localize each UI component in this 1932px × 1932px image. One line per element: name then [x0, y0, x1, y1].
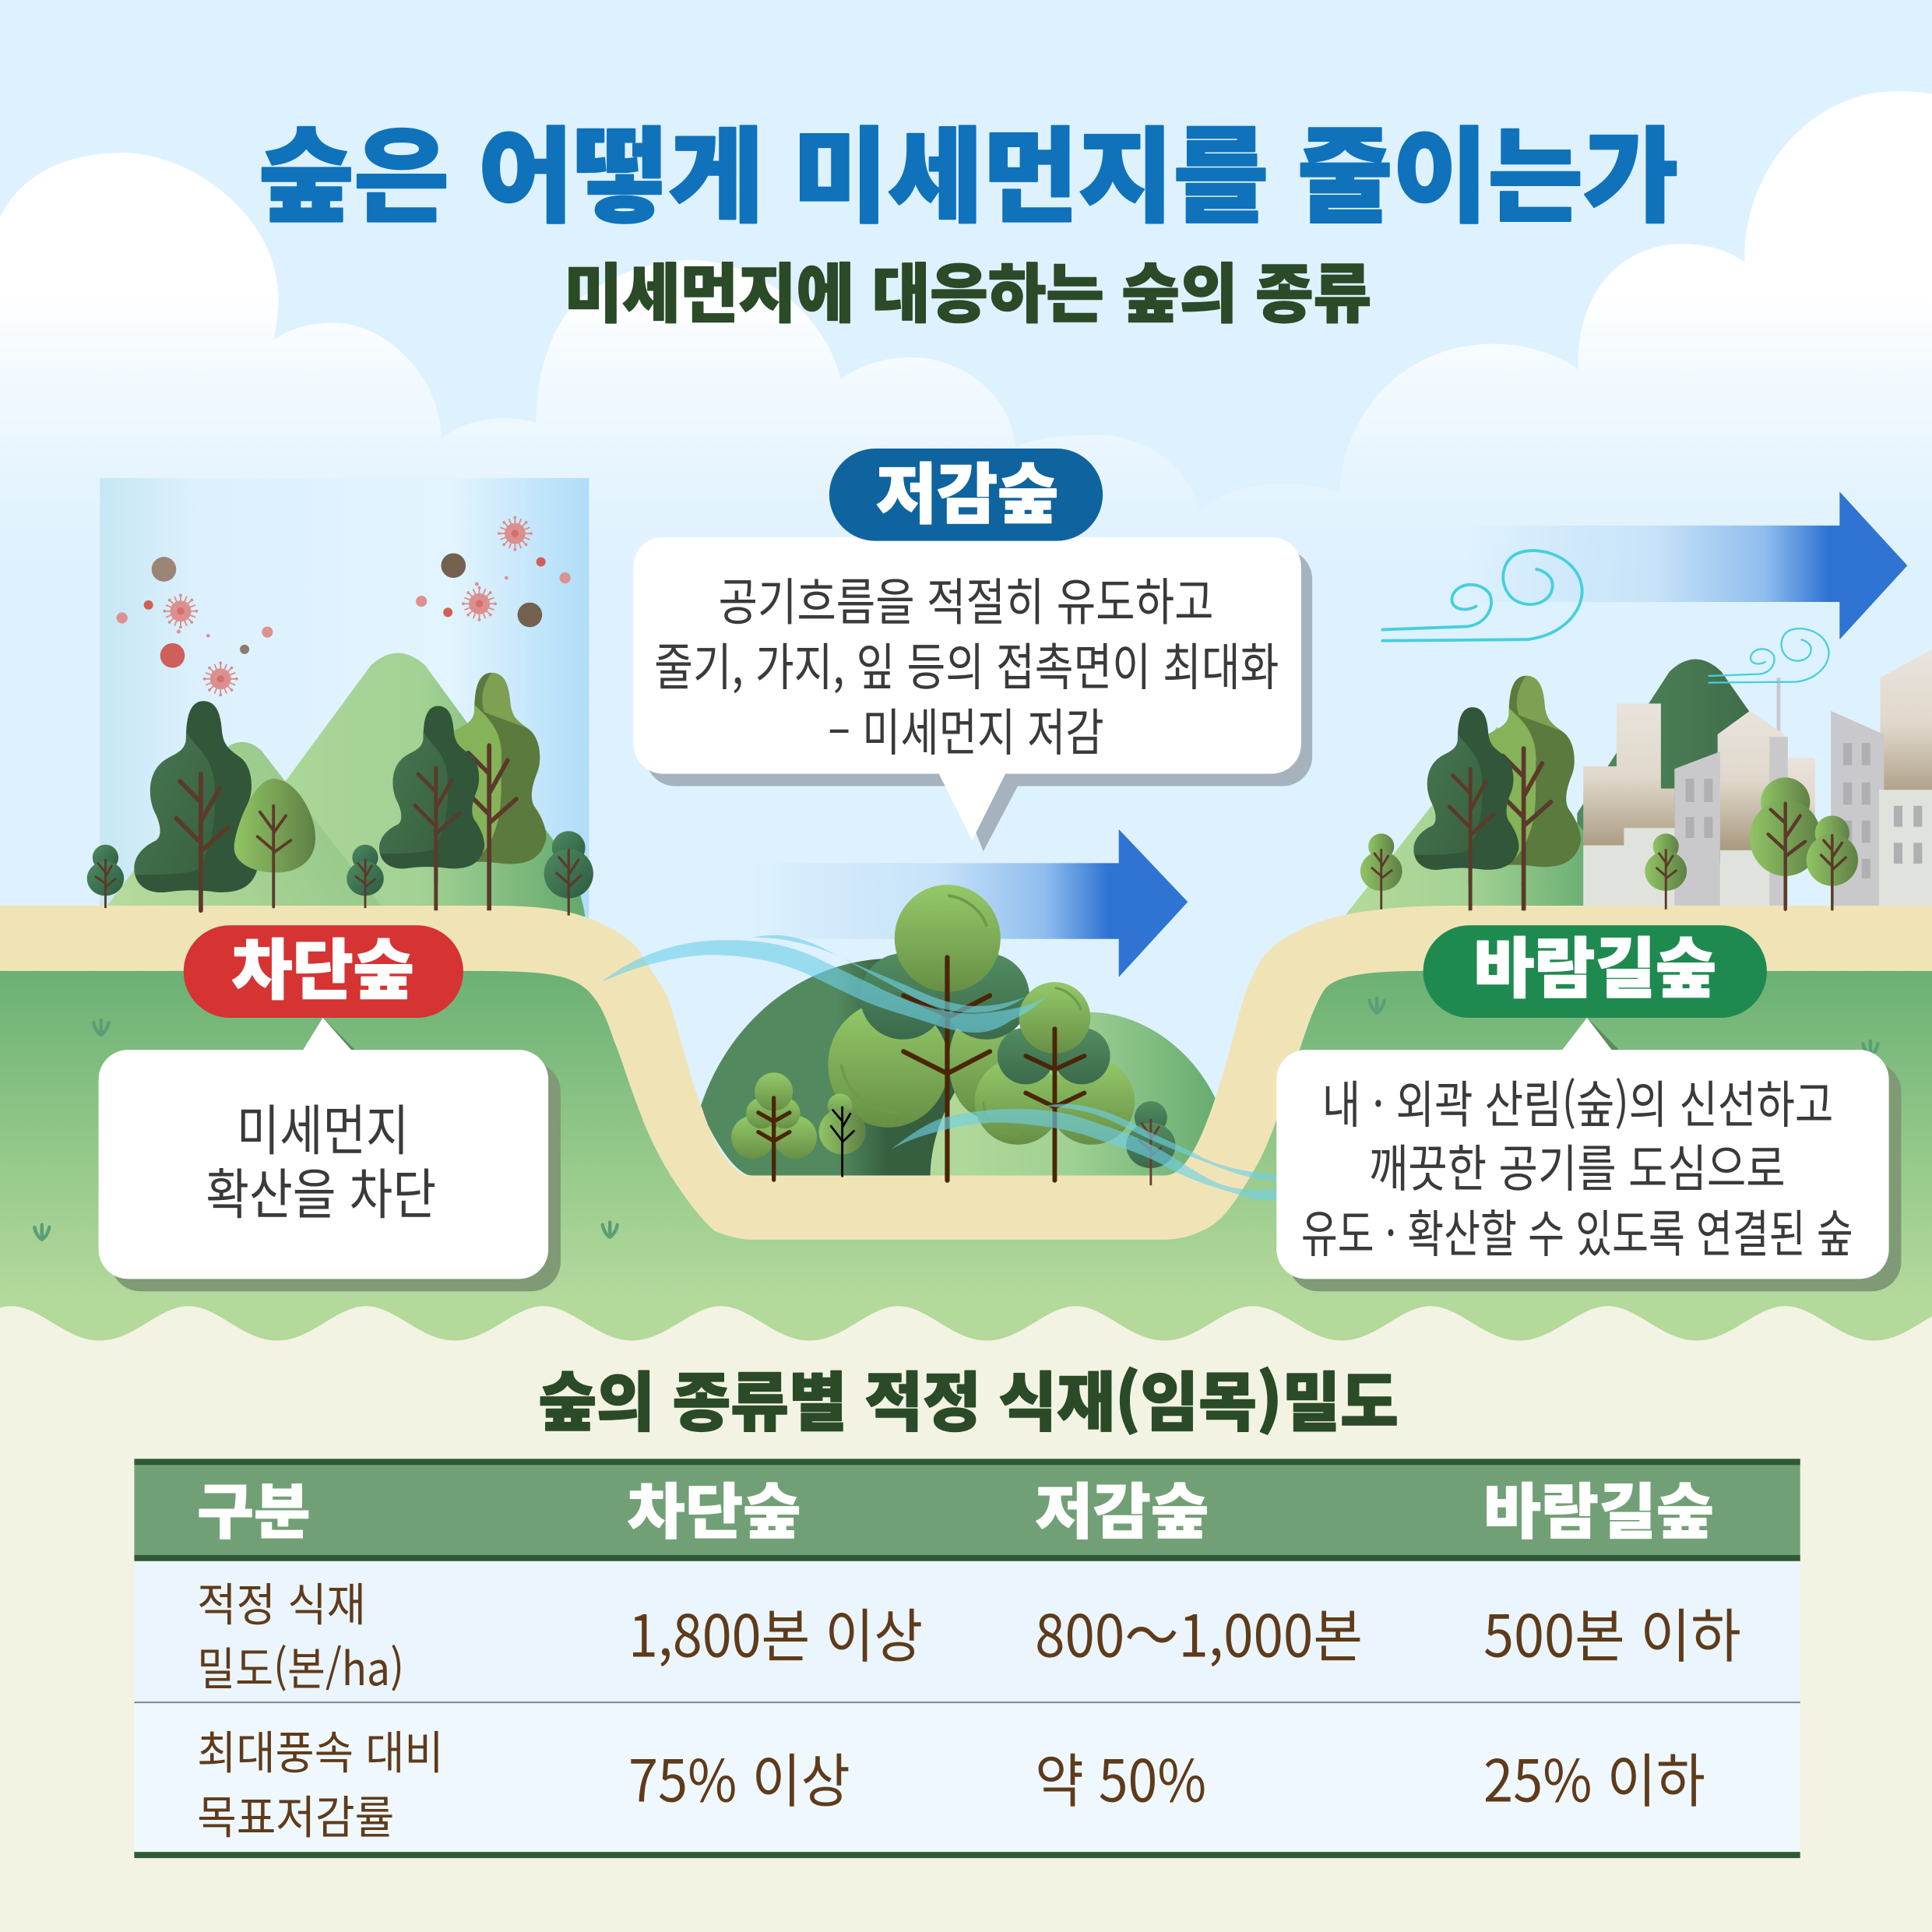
mountains right — [1343, 660, 1756, 918]
callout text — [1301, 1064, 1853, 1267]
table row 2: 목표저감률 — [197, 1780, 394, 1846]
dark pine right of panel — [375, 701, 484, 910]
small tree cluster — [731, 1072, 817, 1180]
callout: 차단숲 — [99, 1018, 561, 1291]
arrow: wind middle — [751, 829, 1188, 977]
medium green tree city — [1807, 815, 1858, 910]
wind ribbons — [601, 935, 1282, 1200]
small dark tree 3 — [544, 831, 593, 916]
label pill: 바람길숲: 바람길숲 — [1473, 917, 1716, 1012]
cream base with wave edge — [0, 1306, 1932, 1932]
callout text: 미세먼지 — [237, 1087, 409, 1166]
table row 1 — [197, 1568, 1741, 1698]
table header row — [134, 1459, 1800, 1561]
label pill: 저감숲: 저감숲 — [876, 443, 1058, 537]
small green tree — [1360, 833, 1402, 910]
icon: wind swirl large — [1382, 551, 1582, 641]
table header row: 차단숲 — [627, 1463, 801, 1550]
table row 2: 75% 이상 — [628, 1735, 850, 1818]
callout text: – 미세먼지 저감 — [828, 692, 1104, 765]
callout text — [654, 561, 1279, 765]
grass tufts — [34, 998, 1877, 1240]
table row 2: 최대풍속 대비 — [197, 1716, 444, 1782]
trees: left group — [87, 673, 593, 916]
icon: wind swirl small — [1709, 628, 1828, 683]
label pill: 차단숲: 차단숲 — [231, 918, 414, 1012]
clouds — [0, 91, 1932, 690]
table row 2: 25% 이하 — [1483, 1735, 1705, 1818]
subtitle: 미세먼지에 대응하는 숲의 종류 — [565, 243, 1371, 336]
label pill: 바람길숲 — [1423, 917, 1767, 1018]
small dark tree 1 — [87, 845, 124, 908]
dark tall pine left — [129, 695, 258, 910]
table header row: 구분 — [197, 1463, 311, 1550]
label pill: 저감숲 — [829, 443, 1103, 541]
label pill: 차단숲 — [184, 918, 463, 1018]
table row 1: 800～1,000본 — [1035, 1590, 1363, 1673]
dark pine — [1409, 702, 1519, 910]
second tree — [975, 982, 1135, 1181]
callout text: 깨끗한 공기를 도심으로 — [1369, 1128, 1786, 1202]
valley hills — [700, 959, 1216, 1177]
arrow: wind right — [1466, 491, 1907, 639]
small green tree city — [1645, 833, 1687, 910]
callout text: 공기흐름을 적절히 유도하고 — [718, 561, 1214, 635]
table row 1: 적정 식재 — [197, 1568, 366, 1634]
table row 1: 밀도(본/ha) — [197, 1632, 404, 1698]
table row 1: 500본 이하 — [1483, 1590, 1741, 1673]
thin tree — [819, 1093, 866, 1176]
big tree — [828, 885, 1029, 1181]
callout text: 내 · 외곽 산림(숲)의 신선하고 — [1322, 1064, 1833, 1137]
trees: right group — [1360, 676, 1858, 910]
olive tall pine — [417, 673, 546, 910]
valley trees — [731, 885, 1175, 1185]
callout text: 확산을 차단 — [206, 1152, 436, 1230]
large green tree city — [1750, 777, 1821, 910]
particulate matter cluster — [117, 516, 571, 696]
table heading: 숲의 종류별 적정 식재(임목)밀도 — [538, 1351, 1399, 1444]
small dark tree 2 — [347, 845, 384, 908]
table row 2 — [197, 1716, 1705, 1846]
city buildings — [1583, 649, 1932, 910]
table: planting density — [134, 1459, 1800, 1858]
callout: 바람길숲 — [1276, 1018, 1901, 1291]
title: 숲은 어떻게 미세먼지를 줄이는가 — [259, 94, 1678, 244]
table row 1: 1,800본 이상 — [628, 1590, 923, 1673]
olive pine — [1452, 676, 1581, 910]
round green tree — [234, 779, 315, 907]
panel: particulate backdrop — [100, 478, 589, 922]
callout text: 줄기, 가지, 잎 등의 접촉면이 최대화 — [654, 627, 1279, 700]
ground green — [0, 969, 1932, 1355]
table header row: 바람길숲 — [1483, 1463, 1714, 1550]
sand path — [0, 906, 1932, 1240]
table header row: 저감숲 — [1035, 1463, 1209, 1550]
table row 2: 약 50% — [1035, 1735, 1206, 1818]
mountains left — [104, 653, 586, 918]
callout: 저감숲 — [633, 537, 1312, 851]
callout text — [206, 1087, 436, 1230]
dark tree — [1126, 1101, 1175, 1185]
